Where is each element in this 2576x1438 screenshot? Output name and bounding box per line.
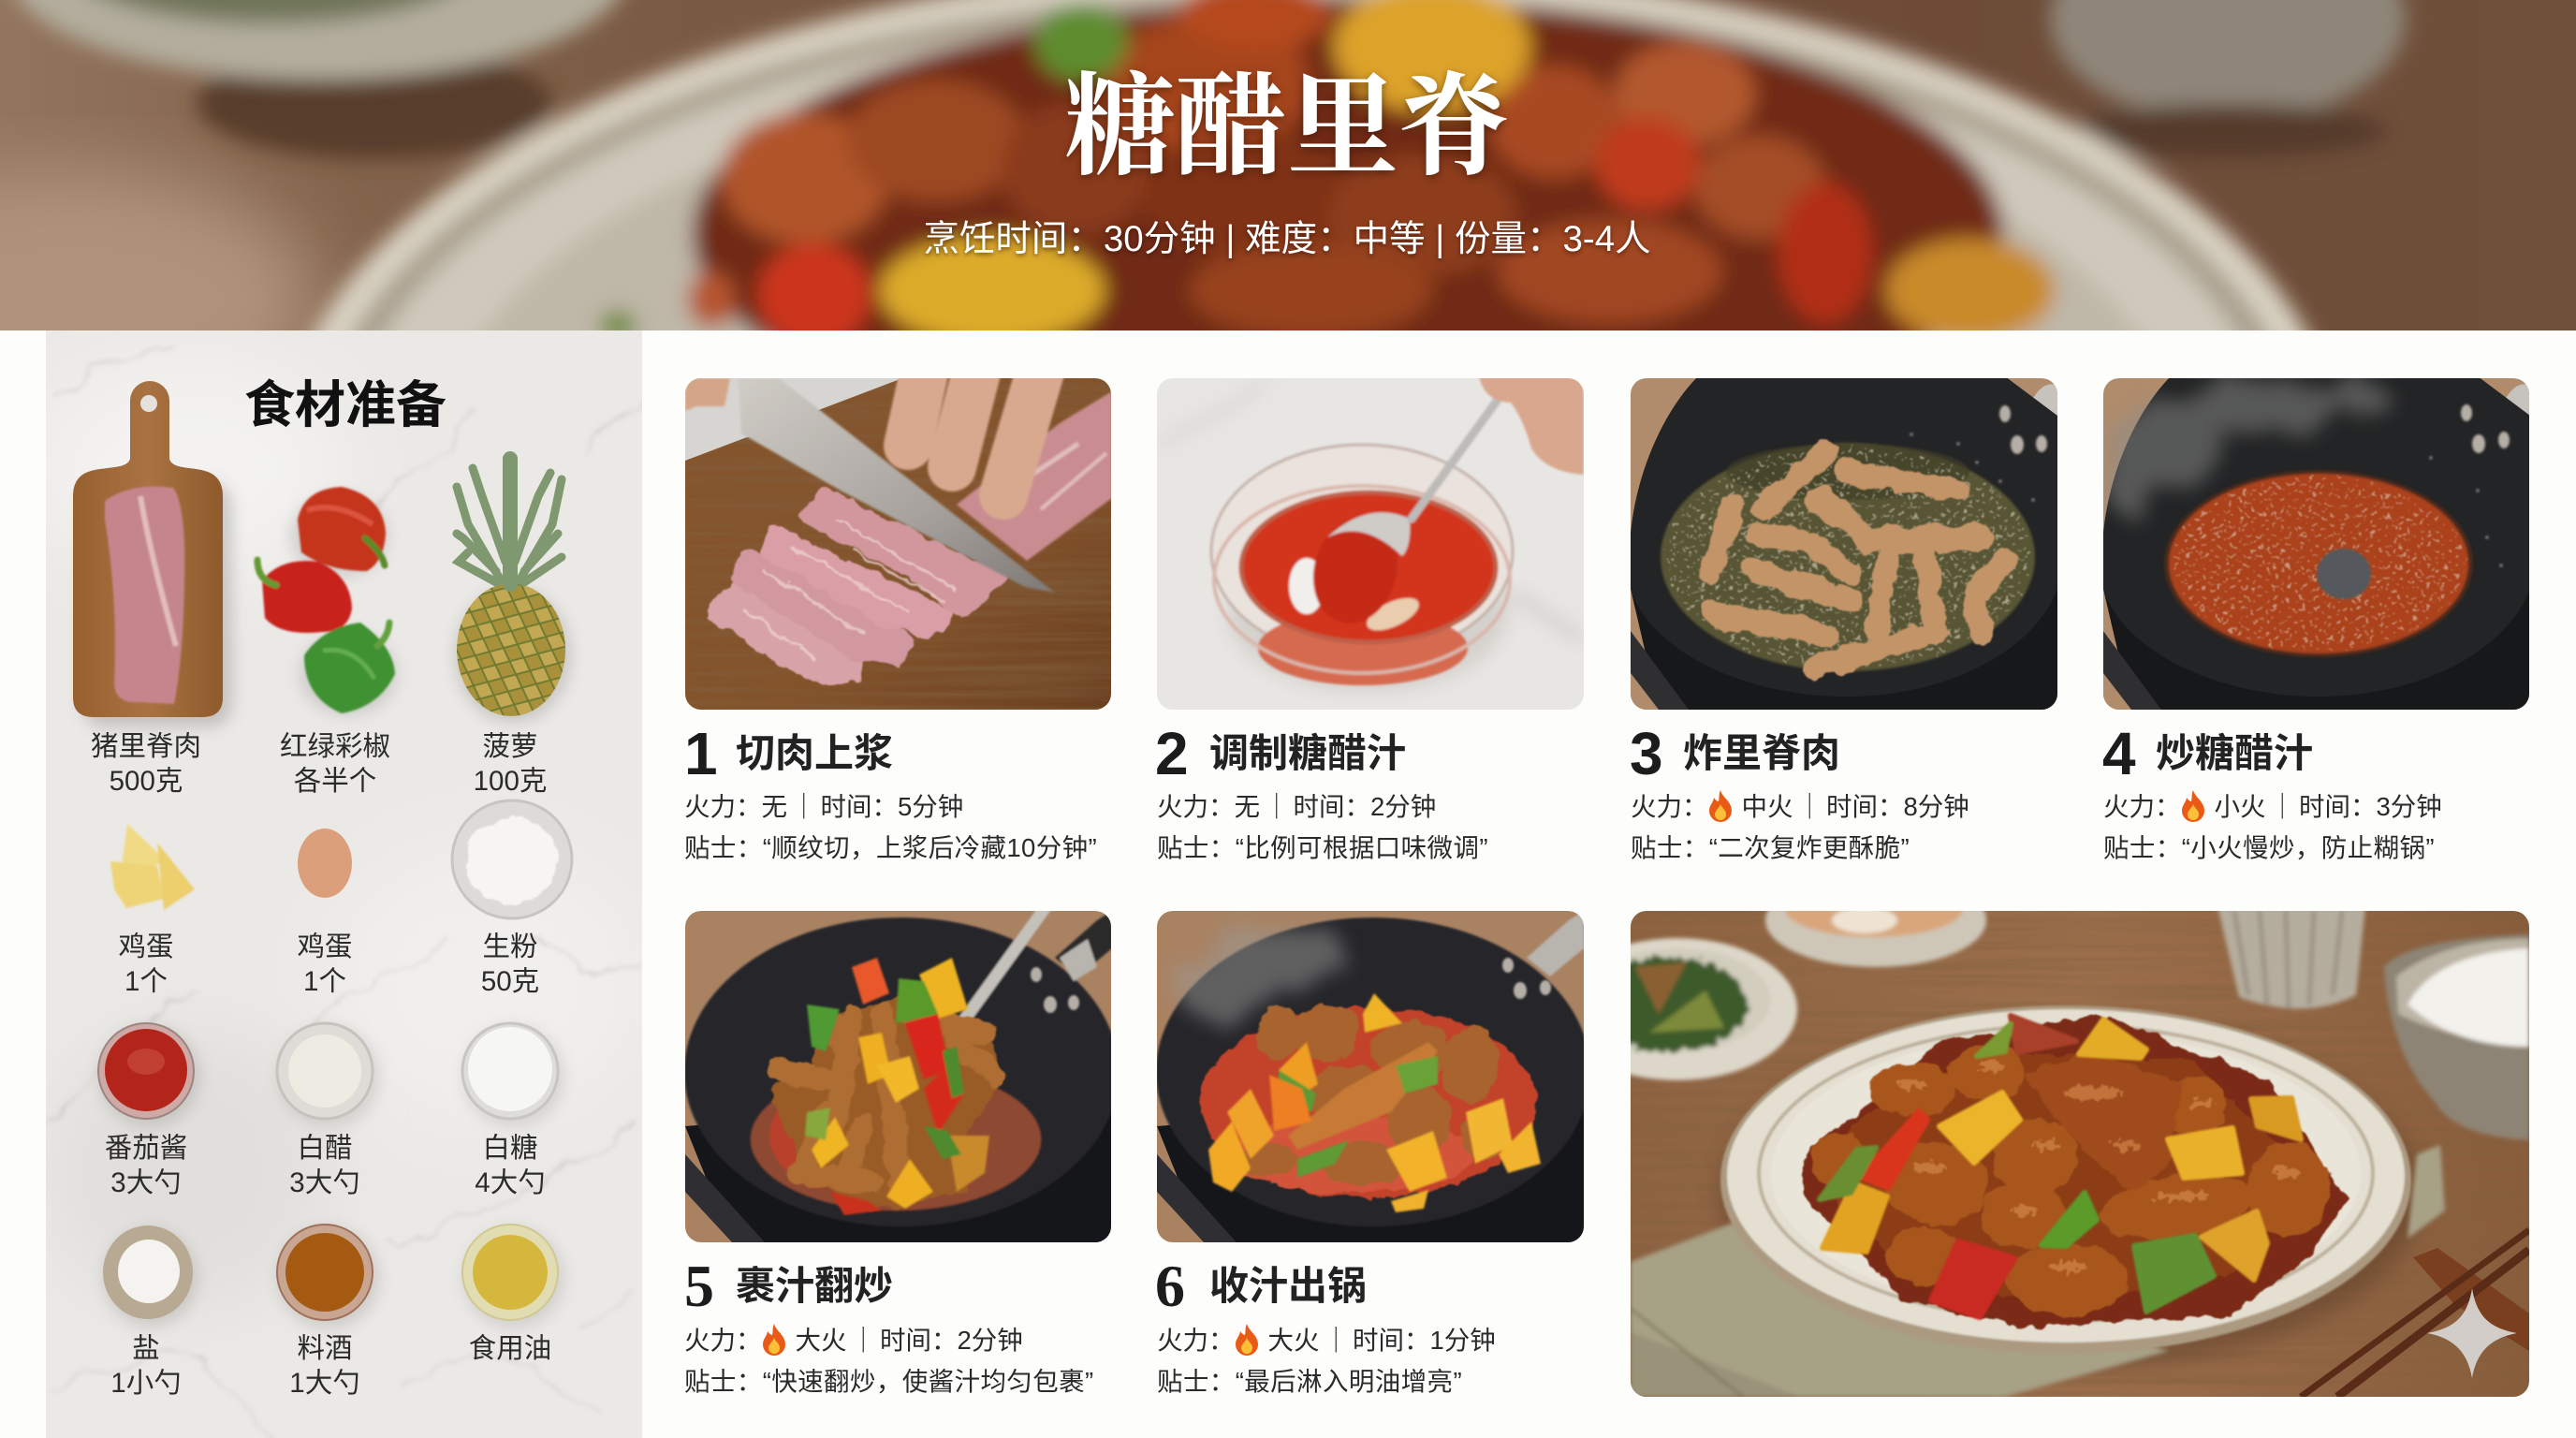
label: egg 2: 1个 xyxy=(303,966,346,997)
panel: ingredients xyxy=(46,330,642,1438)
step 6 heat and time: 火力： 大火｜时间：1分钟 xyxy=(1157,1326,1496,1355)
napkin xyxy=(1631,1223,2169,1397)
label: oil: 食用油 xyxy=(469,1333,551,1364)
label: vinegar: 白醋 xyxy=(297,1133,352,1164)
step 3 heat and time: 火力： 中火｜时间：8分钟 xyxy=(1631,792,1969,821)
label: wine: 1大勺 xyxy=(289,1368,360,1399)
step 2 number: 2 xyxy=(1155,720,1189,787)
label: sugar: 白糖 xyxy=(482,1133,537,1164)
step 4 title: 炒糖醋汁 xyxy=(2156,731,2313,775)
step 5 photo: tossing in sauce xyxy=(685,911,1111,1242)
step 1 photo: slicing pork xyxy=(685,378,1111,710)
label: salt: 盐 xyxy=(132,1333,160,1364)
label: vinegar xyxy=(289,1133,360,1198)
plate of sweet and sour pork xyxy=(1720,1005,2411,1354)
label: salt xyxy=(110,1333,182,1399)
step 2 photo: mixing sauce xyxy=(1157,378,1584,710)
label: ketchup xyxy=(105,1133,187,1198)
label: pork: 500克 xyxy=(110,766,183,797)
icon: egg xyxy=(298,829,352,898)
label: egg 1: 1个 xyxy=(124,966,168,997)
icon: whole pineapple xyxy=(455,459,571,723)
side dish: top bowl xyxy=(1765,873,1986,967)
step 3 tip: 贴士：“二次复炸更酥脆” xyxy=(1631,833,1910,862)
step 3 title: 炸里脊肉 xyxy=(1683,731,1840,775)
food mass xyxy=(693,0,2003,468)
icon: ketchup dish xyxy=(98,1023,200,1127)
step 2 title: 调制糖醋汁 xyxy=(1209,731,1406,775)
step 2 heat and time: 火力：无｜时间：2分钟 xyxy=(1157,792,1436,821)
label: vinegar: 3大勺 xyxy=(289,1167,360,1198)
label: sugar: 4大勺 xyxy=(475,1167,546,1198)
label: pineapple xyxy=(474,731,547,797)
icon: pork on cutting board xyxy=(73,381,232,727)
side dish: greens xyxy=(1558,938,1797,1080)
step 1 tip: 贴士：“顺纹切，上浆后冷藏10分钟” xyxy=(684,833,1097,862)
label: pineapple: 菠萝 xyxy=(482,731,537,762)
label: ketchup: 3大勺 xyxy=(110,1167,182,1198)
ingredient illustrations on marble xyxy=(46,360,635,1438)
finished dish photo xyxy=(1631,911,2529,1397)
icon: bowl of starch xyxy=(452,800,572,918)
icon: salt dish xyxy=(103,1225,198,1327)
label: starch xyxy=(481,932,539,997)
step 3 number: 3 xyxy=(1630,720,1663,787)
icon: cooking oil dish xyxy=(462,1225,564,1328)
step 5 tip: 贴士：“快速翻炒，使酱汁均匀包裹” xyxy=(684,1367,1094,1396)
rice bowl xyxy=(2384,934,2529,1140)
label: pork xyxy=(91,731,201,797)
step 6 photo: reducing sauce xyxy=(1157,911,1584,1242)
label: pineapple: 100克 xyxy=(474,766,547,797)
header banner xyxy=(0,0,2576,330)
step 2 tip: 贴士：“比例可根据口味微调” xyxy=(1157,833,1488,862)
step 3 photo: frying pork xyxy=(1631,378,2057,710)
step 1 heat and time: 火力：无｜时间：5分钟 xyxy=(684,792,963,821)
label: egg 2: 鸡蛋 xyxy=(297,932,352,962)
icon: white sugar dish xyxy=(462,1023,564,1127)
subtitle: time, difficulty, servings: 烹饪时间：30分钟 | 难度：中等 | 份量：3-4人 xyxy=(923,219,1651,259)
ingredient labels xyxy=(91,731,551,1399)
icon: cooking wine dish xyxy=(277,1225,379,1328)
label: salt: 1小勺 xyxy=(110,1368,182,1399)
label: peppers: 各半个 xyxy=(294,766,376,797)
title: 糖醋里脊 xyxy=(1064,66,1510,189)
label: egg 1 xyxy=(118,932,174,997)
label: wine xyxy=(289,1333,360,1399)
icon: pineapple chunks xyxy=(110,824,195,910)
label: peppers: 红绿彩椒 xyxy=(280,731,390,762)
cup xyxy=(2217,906,2365,1009)
step 4 photo: cooking sauce xyxy=(2103,378,2529,710)
step 4 tip: 贴士：“小火慢炒，防止糊锅” xyxy=(2103,833,2435,862)
label: starch: 生粉 xyxy=(482,932,537,962)
label: wine: 料酒 xyxy=(297,1333,352,1364)
step 6 number: 6 xyxy=(1155,1253,1185,1319)
label: pork: 猪里脊肉 xyxy=(91,731,201,762)
step 1 title: 切肉上浆 xyxy=(736,731,893,775)
label: starch: 50克 xyxy=(481,966,539,997)
step 5 heat and time: 火力： 大火｜时间：2分钟 xyxy=(684,1326,1023,1355)
step 1 number: 1 xyxy=(684,720,718,787)
label: egg 2 xyxy=(297,932,352,997)
step 5 number: 5 xyxy=(684,1253,714,1319)
icon: white vinegar dish xyxy=(277,1023,379,1127)
ingredients heading: 食材准备 xyxy=(244,377,446,433)
label: egg 1: 鸡蛋 xyxy=(118,932,174,962)
label: ketchup: 番茄酱 xyxy=(105,1133,187,1164)
label: sugar xyxy=(475,1133,546,1198)
header blurred dish photo xyxy=(0,0,2576,330)
label: peppers xyxy=(280,731,390,797)
step 4 number: 4 xyxy=(2102,720,2136,787)
icon: red and green bell peppers xyxy=(257,487,397,715)
step 6 title: 收汁出锅 xyxy=(1209,1264,1367,1308)
step 6 tip: 贴士：“最后淋入明油增亮” xyxy=(1157,1367,1462,1396)
icon: sparkle mark xyxy=(2427,1288,2517,1378)
step 5 title: 裹汁翻炒 xyxy=(736,1264,893,1308)
chopsticks and rest xyxy=(2301,1230,2529,1397)
step 4 heat and time: 火力： 小火｜时间：3分钟 xyxy=(2103,792,2442,821)
